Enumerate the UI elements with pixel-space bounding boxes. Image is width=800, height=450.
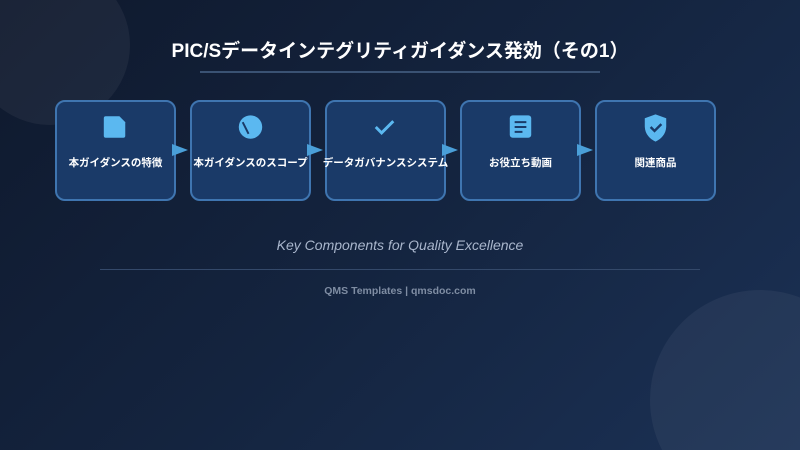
icon: shield xyxy=(644,114,666,142)
subtitle: Key Components for Quality Excellence xyxy=(277,237,523,253)
icon: document xyxy=(104,116,126,138)
arrow xyxy=(172,144,188,156)
footer: QMS Templates | qmsdoc.com xyxy=(324,285,476,297)
icon: check xyxy=(374,120,394,135)
panel: products xyxy=(595,100,716,201)
arrow xyxy=(307,144,323,156)
panel: videos xyxy=(460,100,581,201)
panel: feature 1 xyxy=(55,100,176,201)
label: データガバナンスシステム xyxy=(323,157,448,169)
title: PIC/Sデータインテグリティガイダンス発効（その1） xyxy=(172,41,628,62)
label: 関連商品 xyxy=(634,157,676,169)
arrow xyxy=(577,144,593,156)
icon: circle xyxy=(238,115,262,139)
label: お役立ち動画 xyxy=(489,157,552,169)
label: 本ガイダンスの特徴 xyxy=(69,157,162,169)
panel: governance xyxy=(325,100,446,201)
label: 本ガイダンスのスコープ xyxy=(193,157,308,169)
icon: list xyxy=(510,115,532,138)
arrow xyxy=(442,144,458,156)
panel: scope xyxy=(190,100,311,201)
